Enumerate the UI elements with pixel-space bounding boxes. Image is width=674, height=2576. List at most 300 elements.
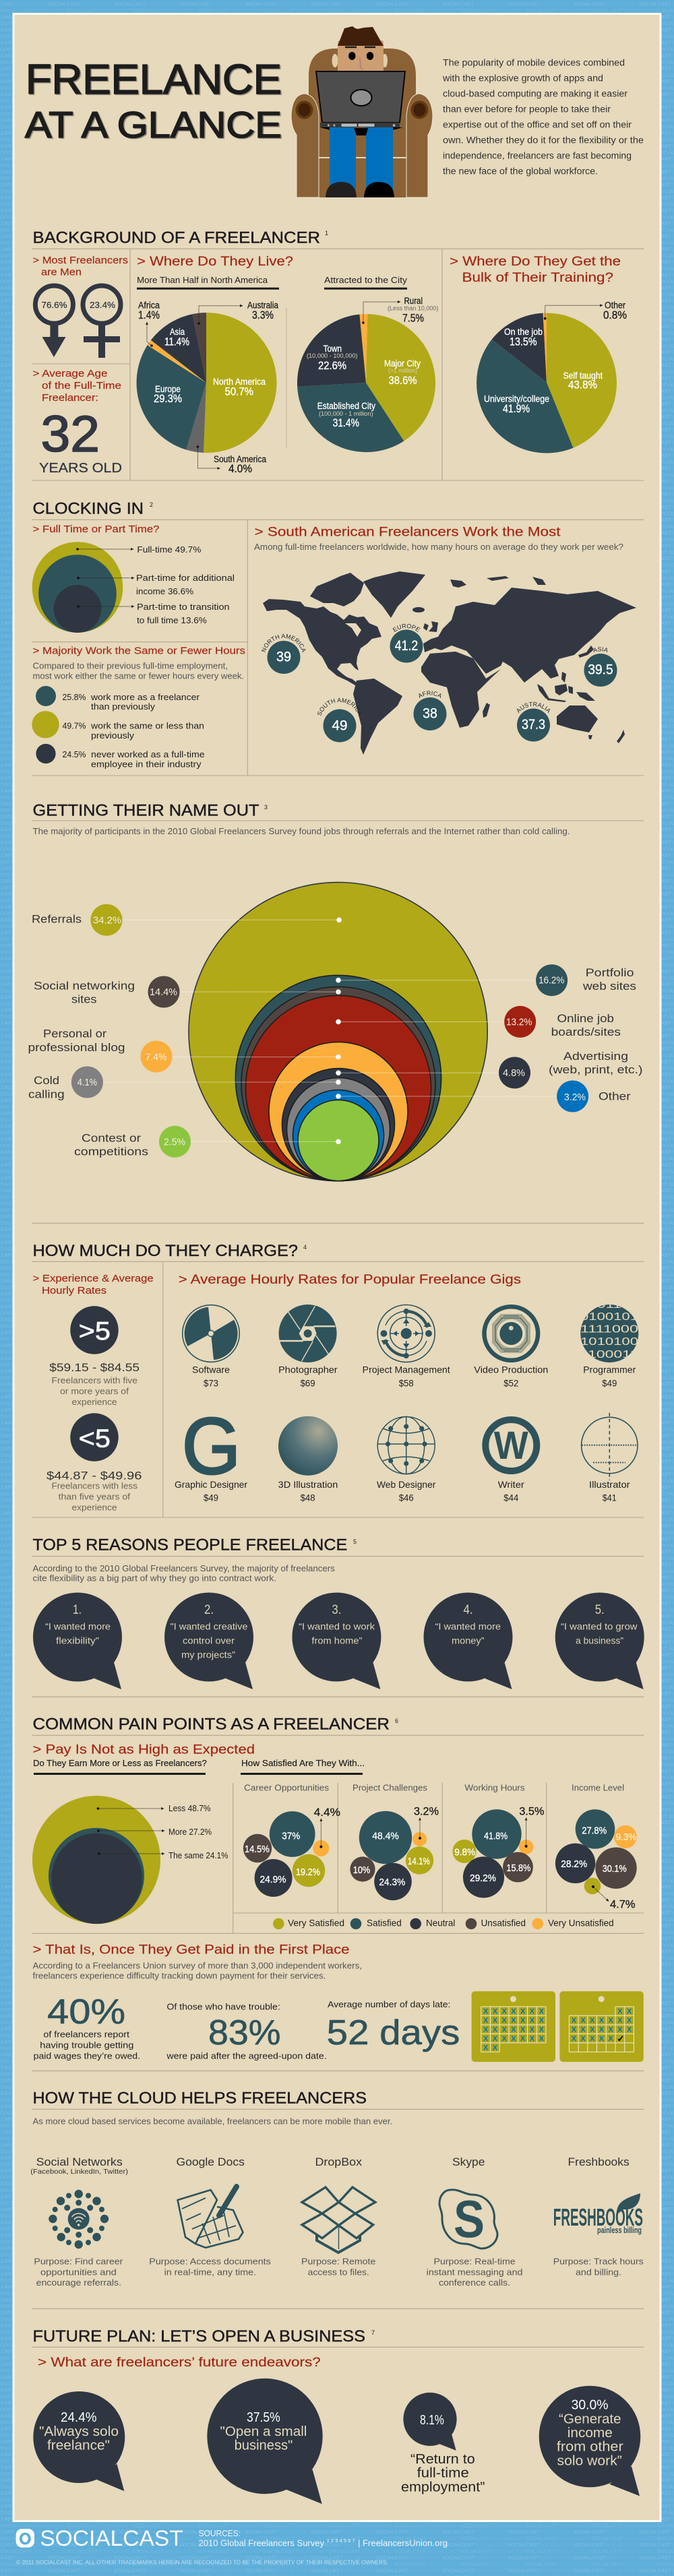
- bubbles: working hours: 29.2%: [470, 1873, 496, 1884]
- nested circles: full or part time: Part-time to transition: [137, 602, 230, 612]
- badge: contests: Contest or: [82, 1131, 141, 1144]
- pie chart: city size: (10,000 - 100,000): [307, 352, 358, 360]
- nested circles: full or part time: [32, 542, 235, 633]
- world map with hours per continent: EUROPE: [392, 624, 421, 632]
- pie chart: training: 43.8%: [568, 379, 597, 391]
- legend: satisfaction: Unsatisfied: [481, 1917, 526, 1928]
- pie chart: regions: North America: [213, 377, 266, 387]
- gig: writer: $44: [503, 1493, 519, 1503]
- sources: SOURCES:: [199, 2528, 241, 2538]
- service: social networks: [30, 2156, 128, 2288]
- text: cloud intro: As more cloud based services become available, freelancers can be more mobile than ever.: [32, 2116, 392, 2127]
- experience block: less than five years: [47, 1413, 142, 1513]
- speech bubble: reason 4: [423, 1593, 512, 1689]
- service: skype: Skype: [452, 2156, 485, 2168]
- heading: background: BACKGROUND OF A FREELANCER: [32, 229, 320, 247]
- intro paragraph: the new face of the global workforce.: [443, 166, 598, 177]
- bubbles: working hours: 41.8%: [484, 1830, 508, 1842]
- badge: cold calling: Cold: [34, 1074, 59, 1087]
- calendar: first month: XXXXXXX: [483, 2026, 545, 2034]
- bubbles: career opportunities: [243, 1783, 340, 1897]
- badge: contests: competitions: [74, 1145, 148, 1158]
- speech bubble: generate income: [539, 2386, 640, 2496]
- speech bubble: return to full-time: [401, 2393, 485, 2494]
- subhead: most freelancers are men: > Most Freelancers: [32, 255, 128, 266]
- section: common pain points: [32, 1716, 644, 2062]
- speech bubble: return to full-time: full-time: [417, 2466, 469, 2481]
- section: background of a freelancer: [32, 229, 644, 480]
- subhead: how satisfied: How Satisfied Are They With...: [241, 1758, 365, 1768]
- section: how the cloud helps: [30, 2071, 644, 2308]
- speech bubble: reason 3: “I wanted to work: [299, 1621, 375, 1632]
- subhead: majority work same or fewer: > Majority Work the Same or Fewer Hours: [32, 646, 245, 657]
- pie chart: regions: Asia: [170, 327, 185, 337]
- footnote 6: 6: [395, 1718, 398, 1724]
- speech bubble: reason 1: 1.: [73, 1603, 82, 1617]
- intro paragraph: own. Whether they do it for the flexibility or the: [443, 135, 644, 146]
- service: freshbooks: painless billing: [597, 2226, 642, 2235]
- gig: programmer: 1100011: [580, 1349, 638, 1360]
- subhead: experience and rates: > Experience & Average: [32, 1274, 154, 1284]
- service: freshbooks: and billing.: [576, 2267, 621, 2277]
- speech bubble: reason 5: “I wanted to grow: [561, 1621, 638, 1632]
- world map with hours per continent: 37.3: [522, 717, 545, 732]
- gig: 3d illustration: [278, 1416, 338, 1503]
- pie chart: training: 41.9%: [503, 402, 530, 415]
- stat: 52 days: [327, 1999, 460, 2052]
- world map with hours per continent: NORTH AMERICA: [262, 633, 306, 652]
- pie chart: regions: [137, 301, 278, 475]
- section: future plan: [32, 2327, 644, 2504]
- world map with hours per continent: [262, 571, 636, 755]
- legend: satisfaction: [273, 1917, 614, 1929]
- pie chart: city size: (>1 million): [388, 367, 417, 375]
- pie chart: city size: [297, 296, 438, 452]
- stat: 52 days: 52 days: [327, 2013, 460, 2052]
- badge: referrals: [32, 904, 123, 936]
- speech bubble: reason 4: “I wanted more: [435, 1621, 501, 1632]
- gig: video production: Video Production: [474, 1364, 548, 1375]
- world map with hours per continent: SOUTH AMERICA: [317, 698, 361, 716]
- connector lines and dots: [103, 918, 557, 1144]
- gig: photographer: $69: [301, 1378, 315, 1389]
- stat: 40 percent: 40%: [47, 1992, 125, 2032]
- gig: illustrator: [582, 1413, 638, 1503]
- title: FREELANCE: [26, 57, 282, 103]
- copyright: © 2011 SOCIALCAST INC. ALL OTHER TRADEMARKS HEREIN ARE RECOGNIZED TO BE THE PROPERTY OF THEIR RESPECTIVE OWNERS.: [16, 2559, 388, 2565]
- subhead: earn more or less: [33, 1758, 207, 1775]
- intro paragraph: with the explosive growth of apps and: [442, 73, 603, 84]
- footnote 3: 3: [264, 804, 268, 811]
- title: [25, 57, 282, 146]
- world map with hours per continent: 38: [423, 705, 437, 721]
- subhead: most freelancers are men: [32, 255, 128, 278]
- gig: writer: [485, 1420, 537, 1503]
- bubbles: career opportunities: Career Opportunities: [244, 1783, 330, 1793]
- speech bubble: always solo: "Always solo: [39, 2424, 119, 2439]
- bubbles: career opportunities: 37%: [282, 1830, 300, 1842]
- gig: project management: [363, 1305, 450, 1389]
- badge: online job boards: [504, 1006, 621, 1038]
- speech bubble: reason 4: 4.: [464, 1603, 473, 1617]
- intro paragraph: cloud-based computing are making it easier: [443, 89, 628, 99]
- bubbles: career opportunities: 14.5%: [245, 1844, 270, 1855]
- subhead: average age: of the Full-Time: [42, 381, 121, 391]
- service: skype: instant messaging and: [427, 2267, 523, 2277]
- experience block: less than five years: $44.87 - $49.96: [47, 1470, 142, 1482]
- pie chart: regions: 1.4%: [138, 309, 160, 321]
- badge: portfolio web sites: web sites: [582, 980, 636, 993]
- calendar: first month: XXXXXXX: [483, 2008, 545, 2016]
- speech bubble: reason 1: flexibility”: [56, 1635, 99, 1645]
- text: freelancers union survey: According to a Freelancers Union survey of more than 3,000 independent workers,: [32, 1961, 362, 1971]
- text: compared to previous employment: Compared to their previous full-time employment,: [32, 661, 228, 671]
- stat: 40 percent: of freelancers report: [43, 2029, 129, 2039]
- intro paragraph: than ever before for people to take their: [443, 104, 611, 115]
- intro paragraph: expertise out of the office and set off on their: [443, 120, 632, 130]
- legend: hours compared: work more as a freelancer: [90, 692, 200, 702]
- pie chart: regions: 11.4%: [164, 336, 189, 348]
- pie chart: regions: Africa: [138, 301, 160, 311]
- heading: top 5 reasons: TOP 5 REASONS PEOPLE FREELANCE: [32, 1536, 347, 1554]
- calendar: first month: XXXXXXX: [483, 2017, 545, 2025]
- gig: programmer: $49: [602, 1378, 617, 1389]
- speech bubble: generate income: income: [568, 2426, 613, 2441]
- legend: hours compared: 25.8%: [62, 692, 86, 702]
- gig: illustrator: $41: [603, 1493, 617, 1503]
- stat: 52 days: Average number of days late:: [328, 1999, 450, 2009]
- legend: hours compared: never worked as a full-time: [91, 749, 205, 759]
- badge: referrals: 34.2%: [93, 915, 121, 926]
- title: AT A GLANCE: [25, 104, 282, 146]
- world map with hours per continent: 49: [332, 718, 348, 733]
- gig: programmer: 0101100: [580, 1299, 639, 1311]
- world map with hours per continent: AFRICA: [419, 691, 441, 698]
- bubbles: career opportunities: 24.9%: [260, 1874, 286, 1885]
- speech bubble: reason 4: money”: [452, 1635, 485, 1645]
- gig: software: Software: [192, 1364, 230, 1375]
- pie chart: training: [477, 301, 627, 453]
- speech bubble: open a small business: 37.5%: [247, 2410, 280, 2425]
- nested circles: full or part time: to full time 13.6%: [137, 615, 207, 625]
- subhead: attracted to the city: Attracted to the City: [324, 275, 408, 285]
- badge: cold calling: 4.1%: [78, 1077, 97, 1088]
- speech bubble: return to full-time: employment”: [401, 2480, 485, 2494]
- text: hours question: Among full-time freelancers worldwide, how many hours on average do they work per week?: [254, 542, 623, 552]
- service: skype: Purpose: Real-time: [434, 2257, 516, 2267]
- nested circles: full or part time: Part-time for additional: [136, 573, 235, 583]
- world map with hours per continent: ASIA: [593, 647, 608, 652]
- badge: social networking: Social networking: [34, 980, 135, 992]
- bubbles: income level: [555, 1783, 637, 1911]
- pie chart: city size: 31.4%: [333, 416, 359, 429]
- badge: referrals: Referrals: [32, 913, 82, 926]
- legend: hours compared: than previously: [91, 701, 156, 712]
- badge: social networking: sites: [71, 993, 97, 1006]
- pie chart: training: Self taught: [563, 371, 603, 381]
- service: google docs: in real-time, any time.: [164, 2267, 256, 2277]
- gig: video production: [474, 1307, 548, 1389]
- text: survey flexibility: According to the 2010 Global Freelancers Survey, the majority of freelancers: [32, 1563, 335, 1573]
- icon: socialcast logo: [16, 2529, 34, 2548]
- speech bubble: reason 2: [164, 1593, 253, 1689]
- legend: satisfaction: Very Satisfied: [288, 1917, 344, 1928]
- service: freshbooks: Purpose: Track hours: [553, 2257, 644, 2267]
- stat: 40 percent: [34, 1992, 140, 2061]
- speech bubble: reason 5: a business”: [576, 1635, 623, 1645]
- pie chart: training: Other: [605, 301, 625, 311]
- text: freelancers union survey: freelancers experience difficulty tracking down payment for their services.: [32, 1970, 326, 1980]
- bubbles: income level: 27.8%: [582, 1825, 607, 1837]
- calendar: first month: XXXXXXX: [483, 2035, 545, 2043]
- subhead: where do they get training: Bulk of Their Training?: [462, 271, 613, 285]
- pie chart: city size: 22.6%: [318, 359, 346, 372]
- subhead: hourly rates: > Average Hourly Rates for Popular Freelance Gigs: [179, 1273, 521, 1287]
- badge: personal blog: [28, 1028, 173, 1073]
- subhead: future endeavors: > What are freelancers’ future endeavors?: [38, 2356, 321, 2370]
- bubbles: project challenges: 3.2%: [414, 1804, 439, 1817]
- pie chart: regions: South America: [214, 454, 266, 464]
- logo text: SOCIALCAST: [40, 2526, 183, 2550]
- text: compared to previous employment: most work either the same or fewer hours every week.: [32, 670, 244, 681]
- speech bubble: reason 2: "I wanted creative: [170, 1621, 248, 1632]
- bubbles: income level: Income Level: [572, 1783, 624, 1793]
- bubbles: career opportunities: 19.2%: [296, 1866, 320, 1878]
- big number: 32 years old: 32: [40, 406, 100, 463]
- calendar: first month: XX: [483, 2044, 498, 2052]
- heading: getting their name out: GETTING THEIR NAME OUT: [32, 802, 259, 820]
- bubbles: working hours: 3.5%: [519, 1804, 544, 1817]
- subhead: once they get paid: > That Is, Once They Get Paid in the First Place: [32, 1943, 349, 1957]
- experience block: more than five years: [49, 1306, 140, 1407]
- badge: online job boards: Online job: [557, 1012, 614, 1025]
- speech bubble: reason 2: my projects”: [181, 1649, 235, 1660]
- sources: 1 2 3 4 5 6 7: [327, 2539, 355, 2544]
- section: how much do they charge: [32, 1223, 644, 1517]
- big number: 32 years old: YEARS OLD: [39, 460, 122, 476]
- bubbles: income level: 9.3%: [616, 1831, 636, 1843]
- legend: satisfaction: Very Unsatisfied: [548, 1917, 614, 1928]
- pie chart: city size: (100,000 - 1 million): [319, 410, 373, 418]
- gig: photographer: Photographer: [278, 1364, 338, 1375]
- bubbles: income level: 28.2%: [561, 1858, 587, 1870]
- gig: programmer: Programmer: [583, 1364, 636, 1375]
- section: clocking in: [32, 500, 644, 776]
- subhead: average age: Freelancer:: [42, 393, 98, 404]
- pie chart: city size: Major City: [384, 358, 421, 369]
- service: skype: S: [454, 2189, 485, 2249]
- service: dropbox: access to files.: [308, 2267, 369, 2277]
- badge: cold calling: [28, 1066, 103, 1101]
- bubbles: project challenges: [350, 1783, 439, 1900]
- nested circles: earnings: The same 24.1%: [168, 1850, 228, 1860]
- gig: programmer: 0100101: [580, 1311, 638, 1323]
- nested circles: sources of work: [189, 882, 487, 1181]
- nested circles: earnings: More 27.2%: [168, 1827, 212, 1837]
- pie chart: city size: (Less than 10,000): [388, 305, 438, 313]
- calendar: second month: XX: [617, 2008, 632, 2016]
- icon: male symbol 76.6%: 76.6%: [42, 301, 67, 310]
- speech bubble: always solo: [33, 2391, 125, 2491]
- gig: web designer: Web Designer: [377, 1479, 436, 1490]
- sources: | FreelancersUnion.org: [358, 2538, 448, 2548]
- gig: graphic designer: G: [182, 1402, 241, 1491]
- speech bubble: generate income: 30.0%: [572, 2397, 609, 2412]
- heading: clocking in: CLOCKING IN: [32, 500, 144, 518]
- sources: [199, 2528, 448, 2548]
- pie chart: city size: Rural: [404, 296, 423, 306]
- calendar: second month: ✓: [617, 2034, 624, 2044]
- subhead: attracted to the city: [324, 275, 408, 290]
- speech bubble: reason 2: 2.: [204, 1603, 214, 1617]
- pie chart: city size: 38.6%: [388, 374, 417, 387]
- nested circles: earnings: [32, 1796, 228, 1924]
- badge: personal blog: Personal or: [43, 1028, 106, 1040]
- subhead: how satisfied: [241, 1758, 365, 1775]
- badge: portfolio web sites: 16.2%: [539, 975, 564, 986]
- legend: hours compared: work the same or less than: [90, 720, 204, 730]
- bubbles: income level: 30.1%: [603, 1863, 627, 1875]
- badge: other: 3.2%: [564, 1092, 586, 1103]
- subhead: where do they live: > Where Do They Live?: [137, 255, 293, 269]
- legend: hours compared: 24.5%: [62, 749, 86, 759]
- bubbles: working hours: Working Hours: [464, 1783, 525, 1793]
- speech bubble: open a small business: business": [235, 2439, 293, 2453]
- badge: online job boards: 13.2%: [506, 1016, 532, 1028]
- service: social networks: Purpose: Find career: [34, 2257, 123, 2267]
- service: dropbox: DropBox: [315, 2156, 363, 2168]
- calendar: second month: XXXXX: [572, 2035, 613, 2043]
- service: dropbox: [301, 2156, 375, 2277]
- speech bubble: reason 3: from home”: [311, 1635, 363, 1645]
- subhead: most freelancers are men: are Men: [41, 268, 82, 278]
- gig: web designer: $46: [399, 1493, 414, 1503]
- pie chart: regions: 50.7%: [225, 385, 253, 398]
- service: google docs: [149, 2156, 271, 2277]
- speech bubble: open a small business: [207, 2379, 323, 2504]
- bubbles: project challenges: 14.1%: [408, 1856, 430, 1867]
- stat: 83 percent: Of those who have trouble:: [166, 2001, 280, 2011]
- bubbles: project challenges: 10%: [353, 1864, 370, 1876]
- icon: male symbol 76.6%: [35, 286, 73, 357]
- experience block: less than five years: Freelancers with less: [51, 1481, 138, 1491]
- experience block: more than five years: Freelancers with five: [51, 1375, 137, 1385]
- calendar: second month: XXXXXXX: [572, 2017, 632, 2025]
- footnote 7: 7: [371, 2329, 375, 2336]
- bubbles: project challenges: 24.3%: [379, 1877, 405, 1888]
- gig: writer: Writer: [498, 1479, 524, 1490]
- world map with hours per continent: 39.5: [588, 662, 613, 678]
- gig: graphic designer: Graphic Designer: [175, 1479, 247, 1490]
- service: social networks: (Facebook, LinkedIn, Twitter): [30, 2168, 128, 2176]
- heading: how much: HOW MUCH DO THEY CHARGE?: [32, 1242, 298, 1260]
- bubbles: project challenges: Project Challenges: [353, 1783, 427, 1793]
- speech bubble: generate income: solo work”: [557, 2454, 622, 2469]
- text: survey flexibility: cite flexibility as a big part of why they go into contract work.: [32, 1573, 276, 1583]
- nested circles: full or part time: income 36.6%: [136, 586, 193, 596]
- gig: programmer: 1111000: [580, 1323, 639, 1336]
- bubbles: working hours: 15.8%: [506, 1862, 530, 1874]
- gig: 3d illustration: 3D Illustration: [278, 1479, 338, 1490]
- pie chart: city size: 7.5%: [402, 312, 424, 325]
- footnote 4: 4: [303, 1244, 307, 1251]
- pie chart: regions: Europe: [155, 384, 181, 394]
- subhead: experience and rates: [32, 1274, 154, 1296]
- section: getting their name out: [28, 802, 644, 1181]
- experience block: less than five years: experience: [71, 1503, 117, 1513]
- speech bubble: reason 3: 3.: [332, 1603, 341, 1617]
- subhead: where do they get training: [450, 255, 621, 285]
- subhead: south american freelancers: > South American Freelancers Work the Most: [255, 526, 561, 540]
- bubbles: working hours: [453, 1783, 544, 1898]
- subhead: where do they get training: > Where Do They Get the: [450, 255, 621, 269]
- speech bubble: reason 3: [292, 1593, 381, 1689]
- gig: programmer: [580, 1299, 639, 1389]
- badge: other: [557, 1081, 631, 1112]
- subhead: more than half in north america: More Than Half in North America: [137, 275, 268, 285]
- stat: 83 percent: 83%: [208, 2013, 280, 2052]
- subhead: experience and rates: Hourly Rates: [42, 1286, 106, 1296]
- footnote 5: 5: [353, 1538, 357, 1545]
- stat: 83 percent: were paid after the agreed-upon date.: [166, 2050, 327, 2061]
- calendar: first month: [472, 1991, 555, 2062]
- service: social networks: opportunities and: [40, 2267, 117, 2277]
- experience block: less than five years: <5: [79, 1425, 111, 1453]
- pie chart: regions: 3.3%: [252, 309, 274, 321]
- badge: cold calling: calling: [28, 1088, 65, 1101]
- pie chart: training: On the job: [504, 327, 543, 337]
- gig: project management: Project Management: [363, 1364, 450, 1375]
- gig: video production: $52: [503, 1378, 519, 1389]
- pie chart: training: 13.5%: [510, 336, 537, 348]
- gig: photographer: [278, 1305, 338, 1389]
- sources: 2010 Global Freelancers Survey: [199, 2538, 324, 2548]
- speech bubble: generate income: “Generate: [559, 2412, 621, 2426]
- speech bubble: return to full-time: 8.1%: [420, 2413, 444, 2428]
- world map with hours per continent: 41.2: [395, 638, 418, 654]
- nested circles: full or part time: Full-time 49.7%: [137, 544, 202, 555]
- gig: web designer: [377, 1416, 436, 1503]
- stat: 40 percent: paid wages they’re owed.: [34, 2050, 140, 2061]
- speech bubble: reason 2: control over: [183, 1635, 235, 1645]
- subhead: average age: [32, 369, 121, 404]
- experience block: more than five years: experience: [71, 1397, 117, 1407]
- pie chart: training: 0.8%: [603, 309, 627, 321]
- gig: software: $73: [204, 1378, 218, 1389]
- service: google docs: Purpose: Access documents: [149, 2257, 271, 2267]
- calendar: second month: XXXXXXX: [572, 2026, 632, 2034]
- subhead: more than half in north america: [137, 275, 279, 290]
- pie chart: city size: Established City: [317, 401, 375, 411]
- gig: project management: $58: [399, 1378, 414, 1389]
- text: survey flexibility: [32, 1563, 335, 1583]
- heading: future plan: FUTURE PLAN: LET’S OPEN A BUSINESS: [32, 2327, 365, 2346]
- bubbles: income level: 4.7%: [610, 1898, 636, 1911]
- legend: satisfaction: Neutral: [426, 1917, 455, 1928]
- legend: hours compared: [32, 686, 205, 769]
- gig: 3d illustration: $48: [301, 1493, 315, 1503]
- experience block: more than five years: >5: [79, 1317, 111, 1346]
- section: top 5 reasons: [32, 1536, 644, 1697]
- legend: hours compared: previously: [91, 730, 135, 741]
- text: majority found jobs through referrals: The majority of participants in the 2010 Global Freelancers Survey found jobs through referrals and the Internet rather than cold calling.: [32, 826, 570, 836]
- footnote 1: 1: [325, 230, 328, 237]
- speech bubble: reason 1: [33, 1593, 122, 1689]
- speech bubble: reason 1: “I wanted more: [45, 1621, 111, 1632]
- gig: graphic designer: $49: [204, 1493, 218, 1503]
- badge: social networking: [34, 976, 179, 1008]
- pie chart: regions: 4.0%: [228, 462, 252, 475]
